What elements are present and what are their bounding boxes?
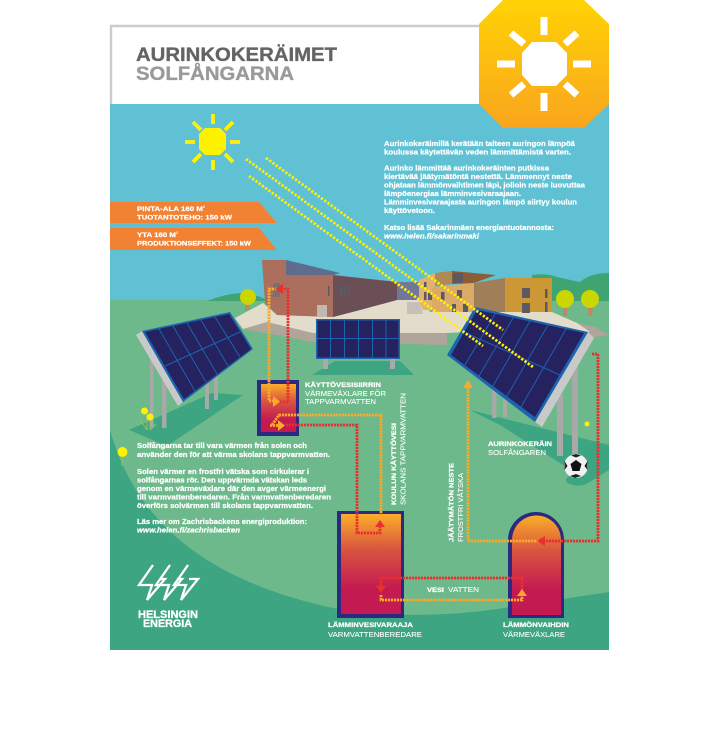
text block: Swedish intro: till varmvattenberedaren. Från varmvattenberedaren (137, 492, 331, 502)
heat exchanger: hot water (257, 380, 299, 436)
info banner: Swedish: YTA 160 M (137, 232, 176, 239)
text block: Finnish intro: käyttövetoon. (384, 206, 435, 215)
label: storage tank: VARMVATTENBEREDARE (328, 630, 422, 639)
label: exchanger: TAPPVARMVATTEN (305, 397, 376, 406)
label: heat exchanger: LÄMMÖNVAIHDIN (503, 620, 569, 629)
text block: Finnish intro: kiertävää jäätymätöntä nestettä. Lämmennyt neste (384, 172, 572, 181)
title: Finnish: AURINKOKERÄIMET (136, 45, 337, 66)
text block: Finnish intro (384, 139, 586, 240)
label: exchanger: VÄRMEVÄXLARE FÖR (305, 389, 386, 398)
info banner: Finnish: TUOTANTOTEHO: 150 kW (137, 214, 233, 222)
buildings (262, 260, 552, 317)
dark foreground ground (110, 430, 609, 650)
info banner: Finnish (110, 202, 277, 223)
sun rays dashed (246, 158, 533, 367)
text block: Swedish intro: www.helen.fi/zachrisbacken (137, 526, 241, 534)
text block: Swedish intro: Läs mer om Zachrisbackens energiproduktion: (137, 517, 307, 526)
solar panel: centre (316, 319, 400, 369)
solar panel: left (136, 312, 253, 428)
title: Swedish: SOLFÅNGARNA (136, 64, 294, 85)
tank: hot water storage (337, 511, 404, 618)
text block: Swedish intro: Solfångarna tar till vara värmen från solen och (137, 441, 307, 450)
text block: Swedish intro: Solen värmer en frostfri vätska som cirkulerar i (137, 467, 309, 476)
text block: Swedish intro: överförs solvärmen till skolans tappvarmvatten. (137, 501, 313, 510)
label: exchanger (305, 380, 386, 406)
logo: Helsingin Energia: ENERGIA (143, 618, 192, 630)
info banner: Swedish: PRODUKTIONSEFFEKT: 150 kW (137, 240, 252, 248)
label: collector: SOLFÅNGAREN (488, 448, 546, 457)
header panel (110, 25, 482, 105)
label: exchanger: KÄYTTÖVESISIIRRIN (305, 380, 381, 389)
label: water: VATTEN (448, 585, 479, 594)
label: storage tank: LÄMMINVESIVARAAJA (328, 621, 413, 629)
label: collector: AURINKOKERÄIN (488, 440, 552, 448)
label: collector (488, 440, 552, 457)
pipes: tank to exchanger loop (376, 578, 527, 600)
label: school tap water: SKOLANS TAPPVARMVATTEN (398, 393, 408, 505)
sun with rays (185, 114, 240, 170)
text block: Swedish intro: solfångarnas rör. Den uppvärmda vätskan leds (137, 476, 307, 484)
pipes: building loop (269, 284, 288, 407)
heat exchanger: rounded (508, 512, 564, 618)
logo: Helsingin Energia (138, 565, 198, 630)
label: storage tank (328, 621, 422, 639)
label: school tap water: KOULUN KÄYTTÖVESI (389, 423, 398, 505)
pipes: collector loop (463, 354, 598, 546)
badge: sun icon (479, 0, 609, 128)
panel shadows (129, 393, 243, 446)
text block: Finnish intro: Aurinko lämmittää aurinkokeräinten putkissa (384, 164, 550, 172)
text block: Swedish intro: genom en värmeväxlare där den avger värmeenergi (137, 484, 326, 493)
label: antifreeze: JÄÄTYMÄTÖN NESTE (446, 462, 456, 542)
trees (240, 289, 599, 316)
main illustrated panel (110, 104, 609, 650)
label: heat exchanger (503, 620, 569, 639)
text block: Finnish intro: lämpöenergiaa lämminvesivaraajaan. (384, 189, 521, 198)
logo: Helsingin Energia: HELSINGIN (138, 609, 198, 621)
icon: football (564, 454, 590, 486)
plaza (235, 300, 609, 345)
label: school tap water (389, 393, 408, 505)
info banner: Swedish (110, 228, 277, 250)
text block: Finnish intro: koulussa käytettävän veden lämmittämistä varten. (384, 148, 571, 156)
solar panel: right (447, 307, 594, 456)
hills (207, 273, 609, 301)
label: water (427, 585, 479, 594)
label: heat exchanger: VÄRMEVÄXLARE (503, 630, 565, 639)
label: water: VESI (427, 587, 444, 594)
text block: Finnish intro: Katso lisää Sakarinmäen energiantuotannosta: (384, 223, 554, 232)
info banner: Finnish: 2 (203, 204, 206, 209)
text block: Swedish intro: använder den för att värma skolans tappvarmvatten. (137, 450, 330, 459)
text block: Swedish intro (137, 441, 331, 534)
info banner: Swedish: 2 (176, 230, 179, 235)
info banner: Finnish: PINTA-ALA 160 M (137, 206, 203, 213)
pipes: exchanger to tank (270, 415, 385, 533)
icon: dandelions (118, 408, 590, 466)
text block: Finnish intro: Lämminvesivaraajasta auringon lämpö siirtyy koulun (384, 198, 577, 206)
text block: Finnish intro: www.helen.fi/sakarinmaki (384, 232, 480, 240)
label: antifreeze: FROSTFRI VÄTSKA (456, 473, 465, 542)
label: antifreeze (446, 462, 465, 542)
text block: Finnish intro: ohjataan lämmönvaihtimen läpi, jolloin neste luovuttaa (384, 180, 586, 190)
text block: Finnish intro: Aurinkokeräimillä kerätään talteen auringon lämpöä (384, 139, 576, 148)
